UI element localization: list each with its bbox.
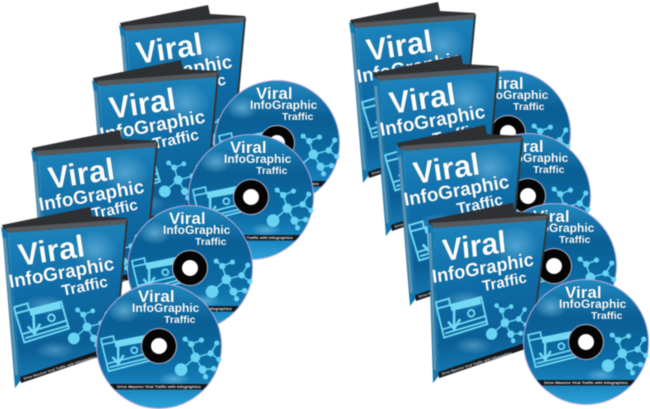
- left disc 2: Viral: [230, 138, 267, 157]
- right disc 1: Traffic: [513, 101, 545, 113]
- right disc 2: Traffic: [533, 164, 565, 176]
- left case 4: Drive Massive Viral Traffic with Infographics: [23, 355, 96, 381]
- left disc 1: Viral: [256, 84, 293, 103]
- left disc 4: [96, 283, 222, 409]
- right case 4: Drive Massive Viral Traffic with Infographics: [441, 351, 512, 376]
- right disc 1: Drive Massive Viral Traffic with Infographics: [466, 171, 551, 176]
- right disc 1: InfoGraphic: [481, 88, 549, 102]
- left case 4: Traffic: [60, 274, 110, 300]
- left disc 3: Drive Massive Viral Traffic with Infographics: [148, 306, 233, 311]
- right case 3: Viral: [411, 146, 482, 191]
- left disc 4: InfoGraphic: [132, 301, 200, 315]
- left disc 3: InfoGraphic: [163, 223, 231, 237]
- right case 2: [372, 55, 499, 236]
- right disc 3: Drive Massive Viral Traffic with Infographics: [512, 304, 597, 309]
- right case 2: Viral: [387, 76, 458, 121]
- left case 2: [92, 60, 219, 241]
- left case 4: InfoGraphic: [7, 254, 116, 293]
- right case 4: Traffic: [481, 269, 528, 296]
- left case 3: Viral: [46, 151, 117, 196]
- left case 2: Drive Massive Viral Traffic with Infographics: [114, 208, 187, 234]
- right case 1: Viral: [364, 23, 435, 68]
- left case 1: Drive Massive Viral Traffic with Infographics: [141, 153, 214, 179]
- left case 3: Drive Massive Viral Traffic with Infographics: [53, 278, 126, 304]
- right disc 2: Drive Massive Viral Traffic with Infographics: [486, 234, 571, 239]
- right case 2: Drive Massive Viral Traffic with Infographics: [394, 203, 467, 229]
- left case 3: InfoGraphic: [37, 177, 146, 216]
- left disc 4: Traffic: [164, 314, 196, 326]
- left case 4: [1, 207, 128, 388]
- right case 2: Traffic: [431, 122, 481, 148]
- right disc 4: Drive Massive Viral Traffic with Infographics: [544, 380, 629, 385]
- left case 4: Viral: [16, 228, 87, 273]
- left case 1: Viral: [134, 26, 205, 71]
- left case 1: [119, 5, 246, 186]
- right disc 2: [465, 133, 591, 259]
- left disc 1: [214, 80, 340, 206]
- right case 4: Viral: [441, 226, 508, 268]
- left disc 4: Drive Massive Viral Traffic with Infographics: [117, 384, 202, 389]
- left disc 1: Drive Massive Viral Traffic with Infographics: [235, 181, 320, 186]
- left case 1: InfoGraphic: [125, 52, 234, 91]
- right disc 3: Traffic: [559, 234, 591, 246]
- left disc 2: Drive Massive Viral Traffic with Infographics: [209, 235, 294, 240]
- right disc 3: Viral: [533, 207, 570, 226]
- right disc 4: Viral: [565, 283, 602, 302]
- left disc 1: Traffic: [282, 111, 314, 123]
- left disc 3: [127, 205, 253, 331]
- left case 2: Viral: [107, 81, 178, 126]
- left disc 3: Traffic: [195, 236, 227, 248]
- right case 1: [349, 2, 476, 183]
- right disc 4: [523, 279, 649, 405]
- right disc 4: Traffic: [591, 310, 623, 322]
- left disc 2: InfoGraphic: [224, 152, 292, 166]
- right case 1: Traffic: [408, 69, 458, 95]
- left case 1: Traffic: [178, 72, 228, 98]
- left disc 4: Viral: [138, 287, 175, 306]
- left case 3: Traffic: [90, 197, 140, 223]
- left disc 3: Viral: [169, 209, 206, 228]
- right case 3: Drive Massive Viral Traffic with Infographics: [418, 273, 491, 299]
- right disc 1: Viral: [487, 74, 524, 93]
- right case 2: InfoGraphic: [378, 102, 487, 141]
- left disc 1: InfoGraphic: [250, 98, 318, 112]
- right disc 2: InfoGraphic: [501, 151, 569, 165]
- right case 3: [396, 125, 523, 306]
- right case 3: InfoGraphic: [402, 172, 511, 211]
- left case 2: InfoGraphic: [98, 107, 207, 146]
- right disc 1: [445, 70, 571, 196]
- right case 3: Traffic: [455, 192, 505, 218]
- right disc 3: [491, 203, 617, 329]
- right disc 4: InfoGraphic: [559, 297, 627, 311]
- right case 4: [420, 202, 550, 384]
- right case 1: InfoGraphic: [355, 49, 464, 88]
- left disc 2: Traffic: [256, 165, 288, 177]
- right case 1: Drive Massive Viral Traffic with Infographics: [371, 150, 444, 176]
- right disc 2: Viral: [507, 137, 544, 156]
- right disc 3: InfoGraphic: [527, 221, 595, 235]
- left case 3: [31, 130, 158, 311]
- left disc 2: [188, 134, 314, 260]
- right case 4: InfoGraphic: [431, 248, 535, 287]
- left case 2: Traffic: [151, 127, 201, 153]
